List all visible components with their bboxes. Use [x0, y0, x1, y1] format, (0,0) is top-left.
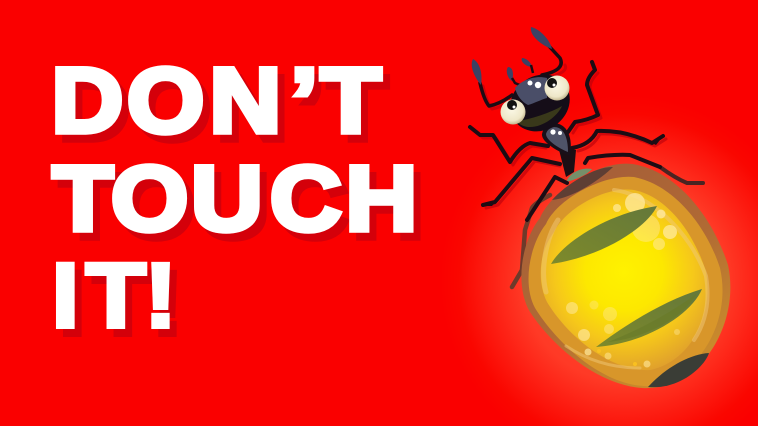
shoulder plate — [552, 167, 613, 200]
thorax — [542, 123, 571, 156]
leg tips — [469, 126, 664, 206]
abdomen tip — [648, 353, 709, 387]
eye left — [500, 100, 526, 124]
ant legs — [470, 45, 663, 220]
abdomen shell — [521, 164, 730, 388]
head chin — [516, 106, 562, 127]
abdomen amber rim — [529, 177, 723, 386]
headline shadow: TOUCH — [59, 155, 424, 258]
head — [499, 63, 581, 143]
background glow — [440, 95, 758, 426]
headline shadow: DON’T — [59, 57, 388, 160]
ant illustration — [469, 27, 730, 388]
brown legs behind abdomen — [512, 167, 703, 287]
headline text — [52, 49, 417, 347]
upper leaf marking — [551, 206, 657, 264]
lower marking highlight — [608, 294, 696, 342]
headline — [52, 49, 424, 355]
headline shadow — [59, 57, 424, 355]
headline text: IT! — [52, 244, 177, 347]
headline text: DON’T — [52, 49, 381, 152]
headline shadow: IT! — [59, 252, 184, 355]
waist — [558, 146, 576, 177]
thorax shine — [546, 127, 568, 152]
antenna tips — [472, 27, 552, 85]
small antennae — [512, 65, 533, 86]
abdomen inner glow — [541, 190, 708, 370]
highlight arcs — [544, 190, 708, 368]
head dome — [515, 77, 547, 105]
lower leaf marking — [596, 289, 702, 347]
headline text: TOUCH — [52, 147, 417, 250]
eye right — [544, 76, 570, 100]
abdomen — [521, 164, 730, 388]
bubbles — [566, 193, 680, 368]
leg shadows — [473, 65, 666, 208]
neck plate — [566, 169, 592, 182]
head highlights — [528, 80, 562, 135]
